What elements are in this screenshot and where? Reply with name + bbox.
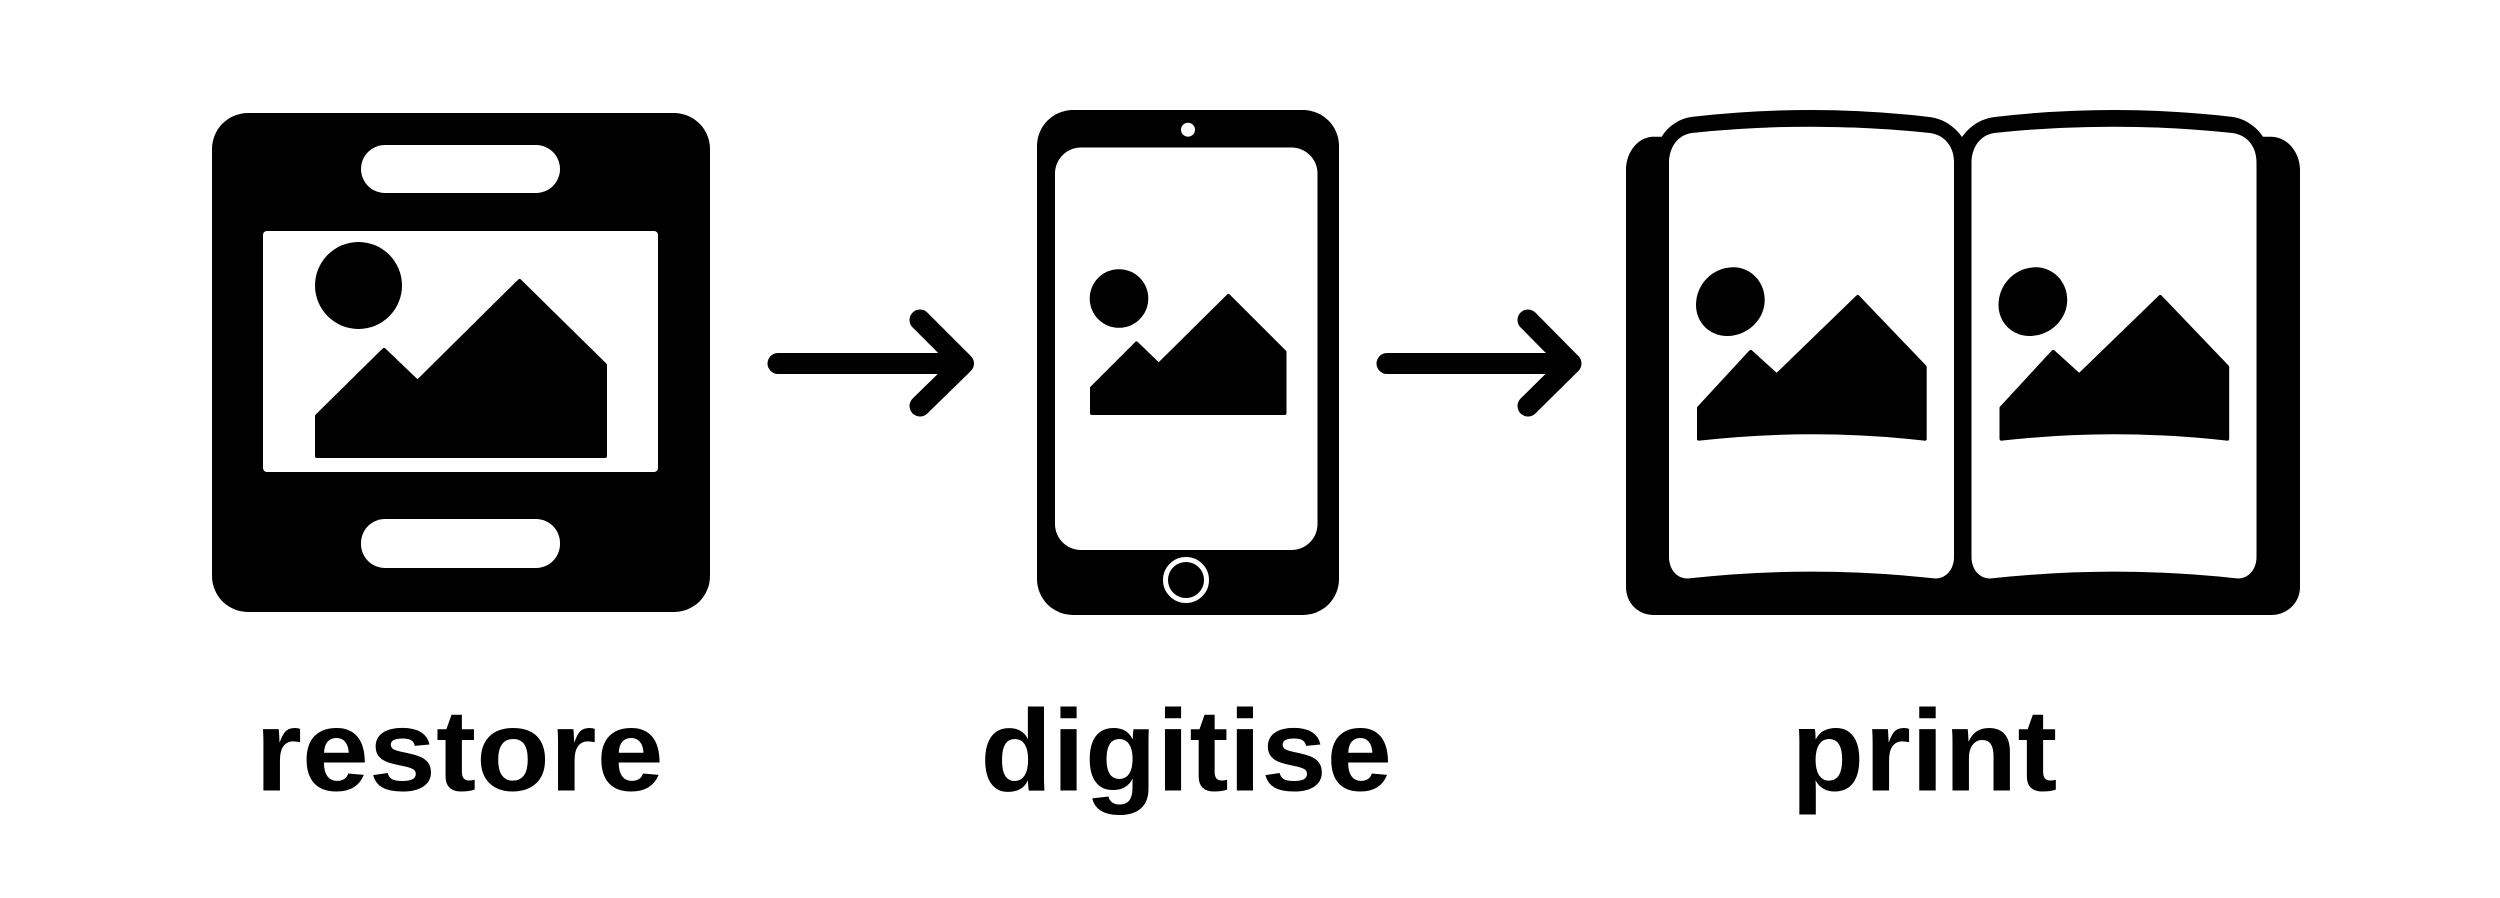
mountains (2002, 297, 2227, 439)
mountains (1699, 297, 1925, 439)
home button (1166, 560, 1206, 600)
top sprocket slot (361, 145, 560, 193)
tablet body (1037, 110, 1339, 615)
icon: sun (315, 242, 402, 329)
arrow: restore to digitise (778, 320, 964, 406)
tablet screen (1055, 148, 1318, 550)
sun (1998, 267, 2067, 336)
right page (1972, 127, 2256, 578)
icon: sun (1090, 269, 1148, 328)
panel: print open book icon (1626, 110, 2300, 615)
label: restore: restore (255, 686, 664, 816)
panel: restore film frame icon (212, 113, 710, 612)
icon: mountains (1092, 296, 1284, 413)
film frame body (212, 113, 710, 612)
icon: right page picture (1998, 267, 2227, 439)
arrow: digitise to print (1387, 320, 1571, 406)
camera dot (1181, 123, 1195, 137)
icon: mountains (317, 281, 605, 456)
label: digitise: digitise (980, 686, 1392, 816)
photo window (263, 231, 658, 472)
panel: digitise tablet icon (1037, 110, 1339, 615)
book cover (1626, 110, 2300, 615)
bottom sprocket slot (361, 519, 560, 568)
sun (1696, 267, 1765, 336)
left page (1669, 127, 1954, 578)
icon: left page picture (1696, 267, 1925, 439)
label: print: print (1791, 686, 2057, 816)
